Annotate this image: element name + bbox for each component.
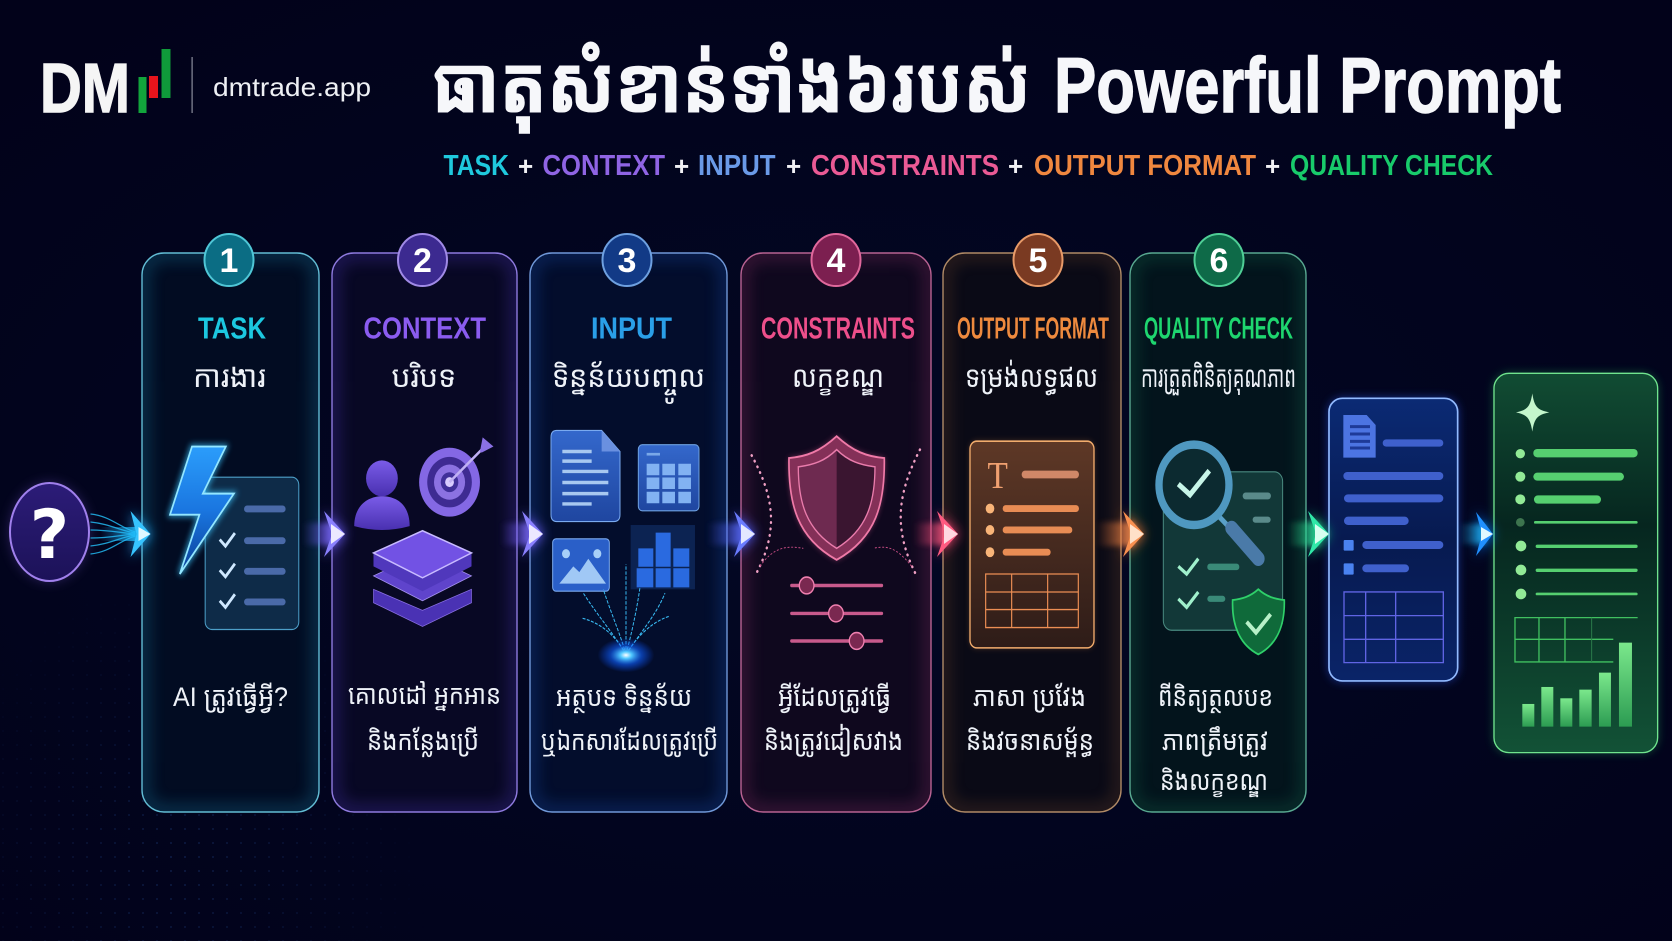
badge 1 <box>204 234 254 286</box>
heading: CONTEXT: CONTEXT <box>364 310 486 346</box>
panel: output format <box>943 234 1121 812</box>
khmer label: លក្ខខណ្ឌ <box>792 361 884 396</box>
subtitle formula: OUTPUT FORMAT <box>1034 150 1256 182</box>
title: ធាតុសំខាន់ទាំង៦របស់ <box>431 41 1031 134</box>
khmer label: បរិបទ <box>392 361 456 394</box>
description: អត្ថបទ ទិន្នន័យ <box>556 682 692 714</box>
icon: question mark <box>10 483 89 581</box>
subtitle formula: + <box>518 151 533 181</box>
heading: INPUT: INPUT <box>591 310 672 346</box>
description: និងលក្ខខណ្ឌ <box>1160 766 1268 798</box>
icon: documents, table, image, blocks <box>551 430 699 672</box>
icon: bolt and checklist <box>170 447 299 629</box>
panel: constraints <box>741 234 931 812</box>
title <box>431 41 1561 134</box>
title: Powerful Prompt <box>1054 41 1561 129</box>
description: ឬឯកសារដែលត្រូវប្រើ <box>541 726 718 758</box>
badge 5 <box>1014 234 1062 286</box>
heading: CONSTRAINTS: CONSTRAINTS <box>761 310 915 346</box>
arrow: constraints to format <box>914 511 958 557</box>
description: គោលដៅ អ្នកអាន <box>348 680 501 712</box>
subtitle formula: + <box>786 151 801 181</box>
icon: magnifier, checklist, shield <box>1159 445 1284 654</box>
description: និងវចនាសម្ព័ន្ធ <box>966 726 1094 758</box>
description: ភាពត្រឹមត្រូវ <box>1162 725 1268 758</box>
description: និងត្រូវជៀសវាង <box>764 723 903 758</box>
description <box>541 682 718 758</box>
icon: format document: T <box>987 454 1008 496</box>
panel: quality check <box>1130 234 1306 812</box>
panel: input <box>530 234 727 812</box>
khmer label: ទម្រង់លទ្ធផល <box>965 359 1098 396</box>
description <box>966 682 1094 758</box>
description <box>1158 682 1273 798</box>
description: AI ត្រូវធ្វើអ្វី? <box>173 682 288 714</box>
khmer label: ការត្រួតពិនិត្យគុណភាព <box>1141 361 1296 396</box>
badge 2: 2 <box>413 242 432 280</box>
icon: person, target, layers <box>354 437 493 626</box>
panel: task <box>142 234 319 812</box>
badge 1: 1 <box>220 242 238 280</box>
arrow: input to constraints <box>707 511 755 557</box>
heading: OUTPUT FORMAT: OUTPUT FORMAT <box>957 310 1109 346</box>
subtitle formula: CONTEXT <box>542 150 665 182</box>
badge 3 <box>602 234 652 286</box>
badge 6: 6 <box>1210 242 1228 280</box>
badge 3: 3 <box>618 242 636 280</box>
arrow: task to context <box>303 511 345 557</box>
output: green final document <box>1494 373 1658 753</box>
logo: DM dmtrade.app: DM <box>40 49 130 127</box>
badge 5: 5 <box>1029 242 1047 280</box>
description: ភាសា ប្រវែង <box>973 682 1086 713</box>
arrow: draft to final <box>1459 512 1493 556</box>
subtitle formula: + <box>1008 151 1023 181</box>
icon: shield and sliders <box>752 436 920 649</box>
heading: QUALITY CHECK: QUALITY CHECK <box>1144 310 1293 346</box>
badge 6 <box>1194 234 1244 286</box>
arrow: quality to draft <box>1287 511 1329 557</box>
icon: question mark: ? <box>30 496 69 575</box>
subtitle formula: CONSTRAINTS <box>811 150 999 182</box>
logo: DM dmtrade.app: dmtrade.app <box>213 72 371 102</box>
description: និងកន្លែងប្រើ <box>367 726 479 758</box>
arrow: format to quality <box>1096 511 1144 557</box>
badge 2 <box>398 234 447 286</box>
arrow: context to input <box>501 511 543 557</box>
subtitle formula: + <box>674 151 689 181</box>
arrow: question to task <box>90 511 150 557</box>
subtitle formula: + <box>1265 151 1280 181</box>
subtitle formula: INPUT <box>698 150 776 182</box>
heading: TASK: TASK <box>198 310 267 346</box>
icon: format document <box>970 441 1094 648</box>
badge 4 <box>812 234 860 286</box>
logo: DM dmtrade.app <box>40 49 371 127</box>
description <box>348 680 501 758</box>
khmer label: ការងារ <box>193 361 266 394</box>
subtitle formula: QUALITY CHECK <box>1290 150 1493 182</box>
badge 4: 4 <box>827 242 846 280</box>
description: អ្វីដែលត្រូវធ្វើ <box>778 682 891 714</box>
subtitle formula <box>444 150 1493 182</box>
panel: context <box>332 234 517 812</box>
khmer label: ទិន្នន័យបញ្ចូល <box>552 360 705 404</box>
subtitle formula: TASK <box>444 150 509 182</box>
description <box>764 682 903 758</box>
output: blue draft document <box>1329 398 1458 681</box>
description: ពីនិត្យត្ថលបខ <box>1158 682 1273 714</box>
